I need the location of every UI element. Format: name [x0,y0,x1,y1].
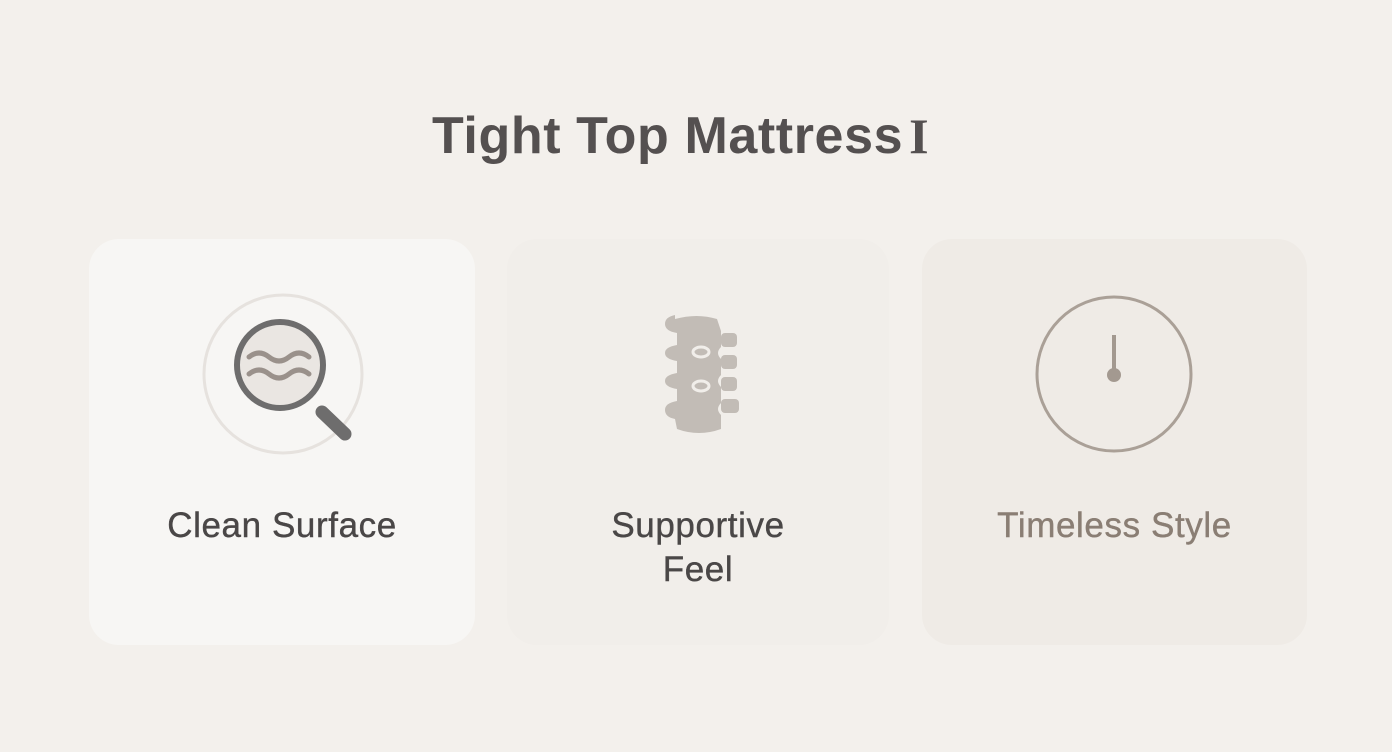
panel: supportive feel [507,239,889,645]
icon: clock [1036,296,1192,452]
icon: magnifier [202,294,364,454]
label: Clean Surface [167,506,397,545]
label: Timeless Style [997,506,1232,545]
icon: spine [665,315,739,433]
panel: clean surface [89,239,475,645]
panel: timeless style [922,239,1307,645]
label [611,506,785,589]
label: Supportive [611,506,785,545]
label: Feel [663,550,733,589]
title: Tight Top MattressI [432,107,929,165]
